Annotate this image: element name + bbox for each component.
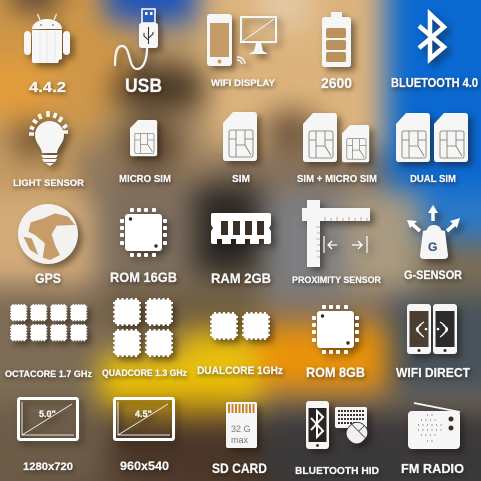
icon: micro sim bbox=[130, 120, 157, 156]
label: USB: USB bbox=[125, 76, 162, 97]
icon: wifi direct bbox=[407, 304, 457, 354]
label: GPS: GPS bbox=[35, 270, 61, 286]
icon: ROM 16GB chip bbox=[120, 208, 167, 257]
icon: quadcore bbox=[113, 298, 173, 357]
icon: bluetooth hid bbox=[306, 401, 371, 449]
label: SIM: SIM bbox=[232, 174, 250, 185]
icon: octacore bbox=[10, 304, 87, 341]
label: ROM 8GB: ROM 8GB bbox=[306, 364, 365, 380]
label: FM RADIO: FM RADIO bbox=[401, 461, 464, 476]
icon: wifi display bbox=[207, 14, 276, 66]
icon: ROM 8GB chip bbox=[312, 305, 359, 354]
icon: android bbox=[24, 14, 70, 63]
label: SIM + MICRO SIM: SIM + MICRO SIM bbox=[297, 174, 377, 185]
label: RAM 2GB: RAM 2GB bbox=[211, 270, 271, 286]
label: PROXIMITY SENSOR: PROXIMITY SENSOR bbox=[292, 275, 381, 286]
label: 4.4.2: 4.4.2 bbox=[29, 79, 66, 96]
icon: sim bbox=[223, 112, 257, 161]
icon: sd card: max bbox=[231, 435, 249, 445]
icon: sd card bbox=[226, 402, 257, 448]
icon: proximity ruler bbox=[302, 200, 370, 267]
label: LIGHT SENSOR: LIGHT SENSOR bbox=[13, 178, 84, 189]
label: DUALCORE 1GHz: DUALCORE 1GHz bbox=[197, 365, 283, 377]
icon: fm radio bbox=[408, 403, 460, 449]
icon: bluetooth bbox=[419, 14, 444, 59]
label: BLUETOOTH HID: BLUETOOTH HID bbox=[295, 465, 379, 477]
icon: sd card: 32 G bbox=[231, 424, 251, 434]
label: 1280x720: 1280x720 bbox=[23, 461, 73, 473]
label: G-SENSOR: G-SENSOR bbox=[404, 270, 463, 282]
icon: battery bbox=[322, 12, 351, 67]
label: OCTACORE 1.7 GHz: OCTACORE 1.7 GHz bbox=[5, 369, 92, 380]
label: WIFI DIRECT: WIFI DIRECT bbox=[396, 365, 470, 380]
icon: USB bbox=[115, 9, 158, 69]
icon: dual sim bbox=[396, 113, 468, 162]
label: SD CARD: SD CARD bbox=[212, 460, 267, 476]
icon: globe bbox=[18, 204, 78, 264]
label: 960x540: 960x540 bbox=[120, 459, 169, 473]
icon: sim plus micro sim bbox=[303, 113, 369, 162]
icon: 4.5 inch screen: 4.5" bbox=[135, 409, 152, 419]
label: ROM 16GB: ROM 16GB bbox=[110, 269, 177, 285]
icon: light sensor bbox=[29, 111, 68, 166]
icon: RAM bbox=[211, 213, 271, 244]
icon: 5.0 inch screen bbox=[18, 398, 78, 440]
label: WIFI DISPLAY: WIFI DISPLAY bbox=[211, 78, 276, 89]
label: MICRO SIM: MICRO SIM bbox=[119, 174, 171, 185]
label: 2600: 2600 bbox=[321, 75, 352, 92]
label: QUADCORE 1.3 GHz: QUADCORE 1.3 GHz bbox=[102, 368, 187, 379]
icon: 4.5 inch screen bbox=[114, 398, 174, 440]
icon: dualcore bbox=[210, 312, 270, 340]
icon: g-sensor weight: G bbox=[428, 240, 437, 254]
icon: g-sensor weight bbox=[407, 205, 460, 259]
icon: 5.0 inch screen: 5.0" bbox=[39, 409, 56, 419]
label: DUAL SIM: DUAL SIM bbox=[410, 174, 456, 185]
